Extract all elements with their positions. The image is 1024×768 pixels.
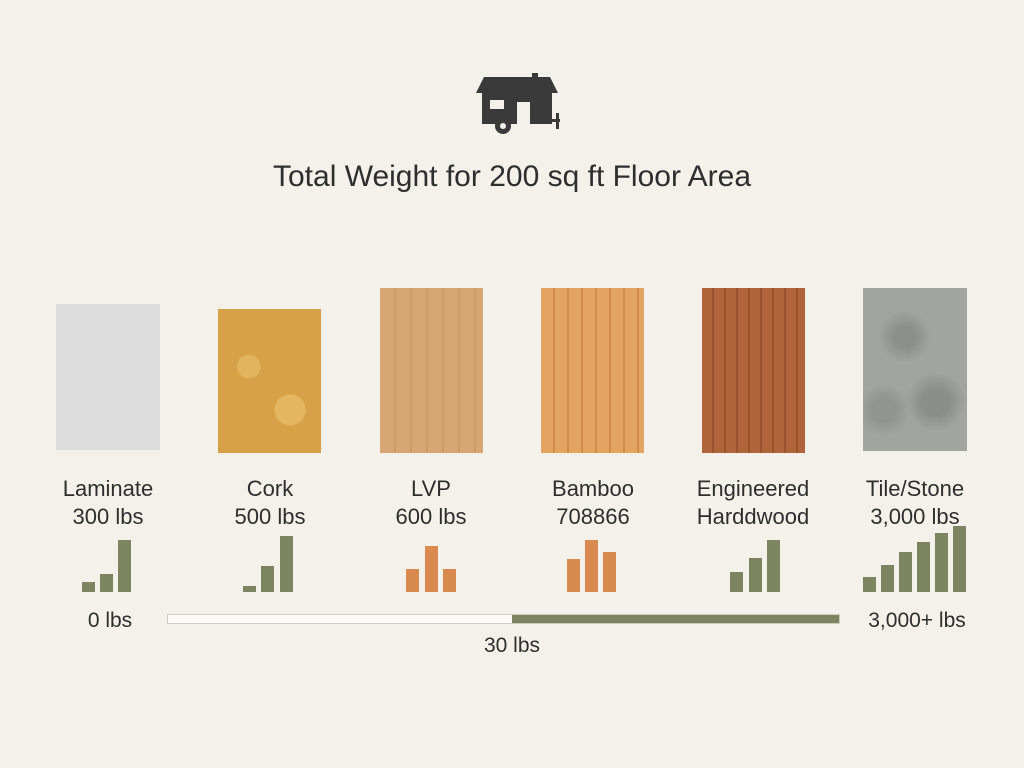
label: LVP bbox=[396, 476, 466, 529]
label: tile/stone: 3,000 lbs bbox=[870, 504, 960, 529]
label: LVP: 600 lbs bbox=[396, 504, 466, 529]
label: engineered hardwood: Engineered bbox=[697, 476, 809, 501]
scale label: 0 lbs: 0 lbs bbox=[88, 609, 132, 632]
scale bar bbox=[167, 614, 840, 624]
icon: tiny house trailer bbox=[476, 73, 560, 134]
label: laminate bbox=[63, 476, 153, 529]
label: bamboo bbox=[552, 476, 634, 529]
label: cork: 500 lbs bbox=[235, 504, 305, 529]
bars: LVP bbox=[406, 546, 456, 592]
label: bamboo: Bamboo bbox=[552, 476, 634, 501]
bars: bamboo bbox=[567, 540, 616, 592]
label: tile/stone: Tile/Stone bbox=[866, 476, 964, 501]
label: cork: Cork bbox=[247, 476, 293, 501]
bars: cork bbox=[243, 536, 293, 592]
swatch: tile/stone bbox=[863, 288, 967, 451]
label: engineered hardwood: Harddwood bbox=[697, 504, 809, 529]
label: cork bbox=[235, 476, 305, 529]
label: tile/stone bbox=[866, 476, 964, 529]
scale label: 30 lbs: 30 lbs bbox=[484, 634, 540, 657]
bars: tile bbox=[863, 526, 966, 592]
label: engineered hardwood bbox=[697, 476, 809, 529]
bars: engineered bbox=[730, 540, 780, 592]
label: laminate: Laminate bbox=[63, 476, 153, 501]
bars: laminate bbox=[82, 540, 131, 592]
label: LVP: LVP bbox=[411, 476, 451, 501]
label: bamboo: 708866 bbox=[556, 504, 630, 529]
swatch: cork bbox=[218, 309, 321, 453]
swatch: LVP bbox=[380, 288, 483, 453]
label: laminate: 300 lbs bbox=[73, 504, 143, 529]
scale label: 3,000+ lbs: 3,000+ lbs bbox=[868, 609, 966, 632]
swatch: bamboo bbox=[541, 288, 644, 453]
swatch: laminate bbox=[56, 304, 160, 450]
swatch: engineered hardwood bbox=[702, 288, 805, 453]
title: Total Weight for 200 sq ft Floor Area bbox=[273, 160, 751, 193]
